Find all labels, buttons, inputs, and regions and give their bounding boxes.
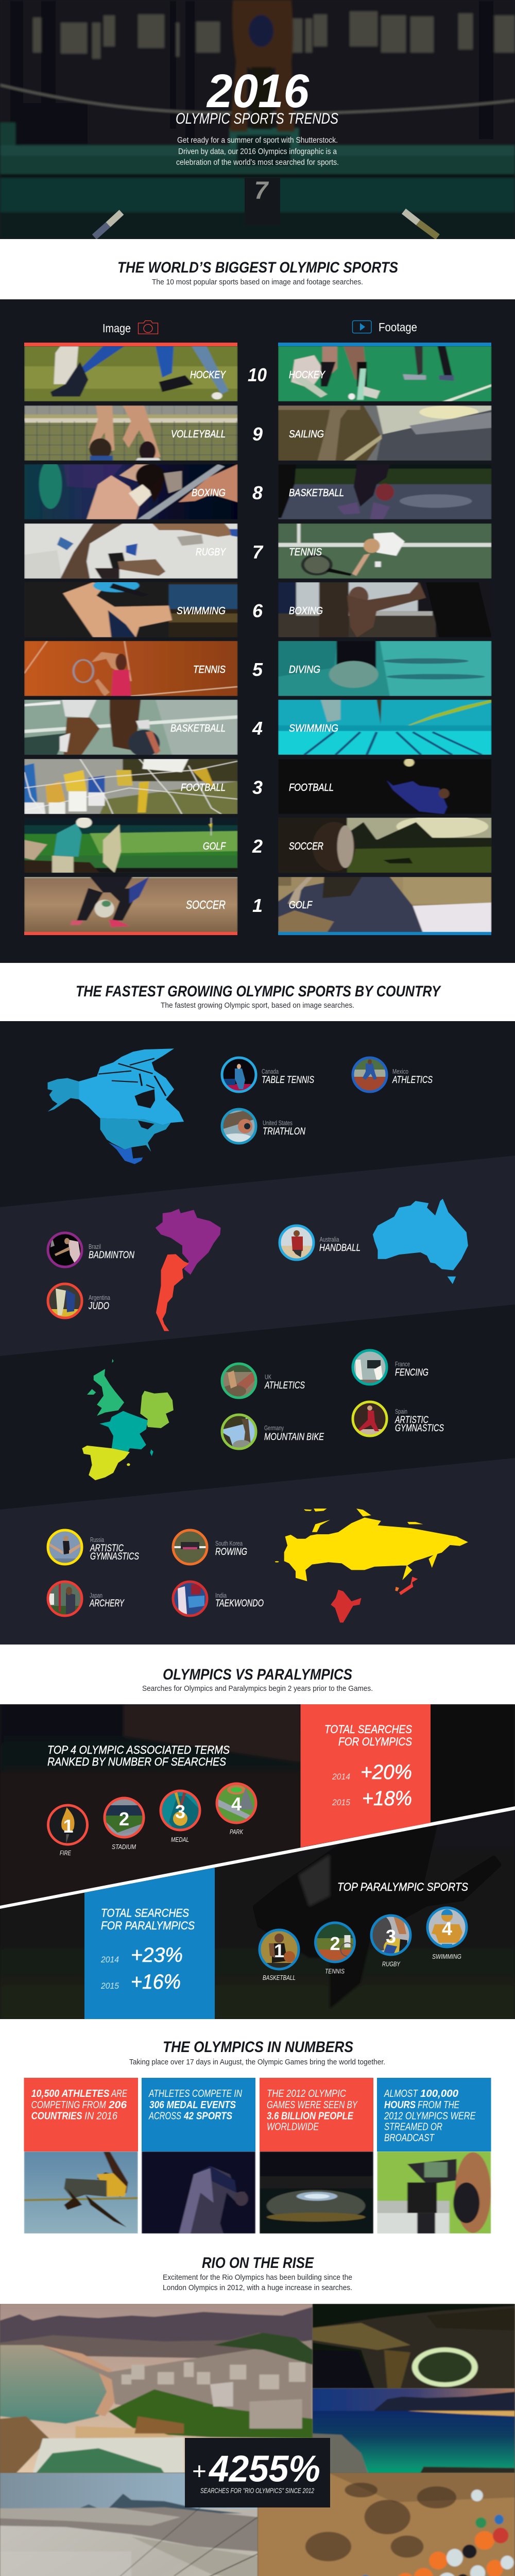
row 3 footage football [278,758,492,814]
term 2 stadium [104,1797,145,1851]
heading: olympics in numbers: THE OLYMPICS IN NUMBERS [163,2039,353,2056]
panel: rio photo collage [0,2304,515,2576]
badge: india: TAEKWONDO [215,1598,264,1609]
rank numbers: 9 [252,423,263,445]
hero subtitle: OLYMPIC SPORTS TRENDS [176,110,338,127]
card: viewers [260,2078,373,2233]
term 2 stadium: STADIUM [112,1843,136,1851]
term 4 park [216,1783,257,1836]
image column header: Image [102,321,131,335]
background stadium [0,1704,515,1910]
panel: top olympic terms: TOP 4 OLYMPIC ASSOCIATED TERMS [47,1743,230,1756]
row 2 footage soccer [278,816,492,873]
footage sport labels: SOCCER [289,841,323,852]
background sprinter [0,1803,515,2019]
heading: olympics vs paralympics: OLYMPICS VS PARALYMPICS [163,1666,352,1683]
badge: canada [221,1057,314,1093]
badge: uk: UK [265,1374,271,1381]
rank numbers: 5 [252,659,263,680]
heading: fastest growing [0,963,515,1021]
term 3 medal: MEDAL [171,1836,189,1843]
badge: brazil [47,1232,134,1268]
badge: spain: ARTISTIC [394,1415,428,1426]
photo: beach umbrellas [258,2473,515,2576]
badge: russia: Russia [90,1536,104,1544]
sport 1 basketball: 1 [274,1940,284,1961]
badge: mexico: ATHLETICS [392,1075,433,1086]
heading: olympics in numbers [0,2019,515,2303]
card: medal events: 42 SPORTS [183,2110,232,2122]
card: viewers: WORLDWIDE [267,2121,319,2133]
badge: germany: MOUNTAIN BIKE [264,1432,324,1443]
photo: rio at night [313,2304,515,2388]
badge: russia [47,1529,139,1565]
swimmer [230,0,295,131]
rank numbers [248,364,267,916]
row 6 image swimming [24,579,238,637]
image sport labels: RUGBY [196,547,226,558]
term 2 stadium: 2 [119,1808,129,1829]
heading: fastest growing: THE FASTEST GROWING OLYMPIC SPORTS BY COUNTRY [76,983,442,1000]
card: broadcast hours: 100,000 [420,2088,459,2099]
term 1 fire: 1 [63,1816,74,1837]
panel: total searches paralympics: 2015 [100,1981,119,1991]
badge: russia: GYMNASTICS [90,1551,139,1562]
panel: total searches paralympics: +16% [131,1971,181,1993]
footage sport labels [289,369,344,911]
hero intro: celebration of the world's most searched for sports. [176,158,339,167]
sport 1 basketball: BASKETBALL [263,1974,296,1981]
rank numbers: 7 [252,541,264,563]
rank numbers: 6 [252,600,263,621]
footage sport labels: GOLF [289,900,313,911]
badge: united states [221,1108,305,1144]
hero banner [0,0,515,239]
row 10 image hockey [24,346,238,401]
panel: total searches olympics: TOTAL SEARCHES [324,1723,412,1736]
card: broadcast hours: ALMOST [383,2088,418,2099]
badge: brazil: BADMINTON [89,1250,134,1261]
photo: copacabana [0,2304,313,2473]
row 4 image basketball [24,700,238,757]
stat box: + [192,2458,207,2484]
row 7 footage tennis [278,523,492,579]
panel: total searches olympics: +18% [362,1787,412,1810]
badge: uk: ATHLETICS [264,1380,305,1391]
card: athletes: COMPETING FROM [31,2099,106,2111]
term 1 fire [47,1804,89,1857]
row 5 footage diving [278,641,492,696]
badge: spain [352,1401,444,1437]
rank numbers: 4 [252,718,263,739]
row 9 image volleyball [24,405,238,461]
row 8 image boxing [24,460,238,519]
image sport labels: HOCKEY [190,369,226,381]
badge: australia: HANDBALL [319,1243,360,1253]
badge: france: FENCING [395,1367,428,1378]
panel: total searches olympics: 2015 [332,1798,350,1807]
badge: germany: Germany [264,1425,284,1432]
badge: japan [47,1581,125,1617]
sport 3 rugby: RUGBY [382,1961,401,1968]
card: athletes [24,2078,138,2233]
panel: total searches paralympics: +23% [131,1944,183,1967]
map: western europe [82,1359,174,1480]
badge: argentina [47,1283,110,1319]
map: north america [47,1048,184,1164]
footage sport labels: SAILING [289,429,324,440]
badge: germany [221,1414,324,1450]
image sport labels: BOXING [192,487,226,499]
stat box: 4255% [208,2448,320,2489]
badge: canada: TABLE TENNIS [262,1075,314,1086]
card: broadcast hours: STREAMED OR [384,2121,442,2133]
badge: france: France [395,1361,410,1368]
panel: total searches olympics [301,1704,431,1848]
row 5 image tennis [24,641,238,696]
image column header [102,320,158,335]
badge: mexico: Mexico [392,1068,408,1075]
rank numbers: 8 [252,482,263,503]
badge: spain: GYMNASTICS [395,1423,444,1434]
sport 1 basketball [259,1929,300,1981]
card: broadcast hours [377,2078,491,2233]
badge: india: India [215,1592,227,1599]
badge: mexico [352,1057,433,1093]
badge: australia [279,1225,360,1261]
badge: japan: ARCHERY [89,1598,125,1609]
map: russia japan india korea [275,1509,468,1622]
sport 4 swimming: SWIMMING [432,1953,461,1960]
sport 2 tennis: 2 [330,1933,340,1954]
map: australia [373,1199,468,1284]
badge: argentina: JUDO [88,1301,109,1312]
badge: argentina: Argentina [89,1294,110,1301]
card: broadcast hours: BROADCAST [384,2132,435,2144]
row 9 footage sailing [278,405,492,461]
row 1 image soccer [24,877,238,932]
heading: rio on the rise: London Olympics in 2012, with a huge increase in searches. [163,2283,352,2292]
sport 4 swimming: 4 [442,1918,452,1939]
card: medal events: ATHLETES COMPETE IN [148,2088,242,2099]
image sport labels: SOCCER [186,898,226,911]
term 4 park: 4 [231,1793,242,1815]
row 2 image golf [24,817,238,873]
heading: biggest sports: THE WORLD’S BIGGEST OLYMPIC SPORTS [117,259,398,276]
image sport labels: TENNIS [193,664,226,675]
panel: total searches olympics: +20% [360,1761,412,1784]
card: medal events: 306 MEDAL EVENTS [149,2099,236,2111]
card: medal events: ACROSS [148,2110,181,2122]
stat box [185,2438,330,2507]
badge: brazil: Brazil [89,1243,101,1250]
card: broadcast hours: HOURS [384,2099,416,2111]
heading: olympics in numbers: Taking place over 17 days in August, the Olympic Games bring the world together. [129,2058,385,2066]
card: viewers: GAMES WERE SEEN BY [267,2099,358,2111]
badge: united states: United States [263,1120,293,1127]
panel: total searches olympics: 2014 [332,1772,350,1782]
badge: south korea: ROWING [215,1547,247,1557]
panel: sports ranking [0,299,515,963]
row 3 image football [24,759,238,814]
image sport labels: VOLLEYBALL [171,429,226,440]
card: athletes: 206 [108,2099,127,2111]
heading: rio on the rise: RIO ON THE RISE [202,2255,314,2272]
lane number: 7 [254,177,269,205]
badge: uk [221,1363,305,1399]
card: athletes: 10,500 ATHLETES [31,2088,110,2099]
photo: ipanema dusk [313,2388,515,2473]
badge: japan: Japan [90,1592,102,1599]
panel: total searches paralympics: 2014 [100,1955,119,1964]
heading: biggest sports: The 10 most popular sports based on image and footage searches. [152,278,363,286]
hero title: 2016 [206,65,310,117]
rank numbers: 10 [248,364,267,385]
hero intro: Driven by data, our 2016 Olympics infographic is a [178,147,337,156]
term 3 medal [160,1790,201,1843]
badge: united states: TRIATHLON [263,1126,305,1137]
card: viewers: THE 2012 OLYMPIC [267,2088,346,2099]
badge: south korea [172,1529,247,1565]
panel: total searches paralympics: TOTAL SEARCHES [101,1906,189,1920]
heading: olympics vs paralympics: Searches for Olympics and Paralympics begin 2 years prior to the Games. [142,1684,373,1693]
row 10 footage hockey [278,346,492,401]
image sport labels: BASKETBALL [170,723,226,734]
sport 2 tennis: TENNIS [325,1968,345,1975]
panel: top paralympic sports [259,1880,468,1981]
badge: canada: Canada [262,1068,279,1075]
heading: fastest growing: The fastest growing Olympic sport, based on image searches. [161,1001,354,1010]
panel: top olympic terms: RANKED BY NUMBER OF SEARCHES [47,1755,226,1768]
image sport labels: SWIMMING [177,605,226,617]
row 8 footage basketball [278,464,492,519]
card: medal events [142,2078,255,2233]
footage sport labels: TENNIS [289,547,322,558]
footage column header: Footage [379,320,417,334]
badge: russia: ARTISTIC [90,1543,124,1554]
heading: rio on the rise [163,2255,352,2292]
image sport labels: FOOTBALL [181,782,226,793]
card: athletes: IN 2016 [84,2110,118,2122]
panel: total searches olympics: FOR OLYMPICS [338,1735,412,1748]
badge: spain: Spain [395,1408,407,1415]
badge: france [352,1349,428,1385]
card: broadcast hours: 2012 OLYMPICS WERE [384,2110,476,2122]
term 4 park: PARK [230,1828,244,1836]
sport 3 rugby [370,1914,411,1968]
footage column header [352,320,417,334]
badge: south korea: South Korea [215,1540,243,1547]
footage sport labels: FOOTBALL [289,782,334,793]
rank numbers: 1 [252,895,263,916]
card: viewers: 3.6 BILLION PEOPLE [267,2110,354,2122]
image sport labels: GOLF [203,841,226,852]
stat box: SEARCHES FOR "RIO OLYMPICS" SINCE 2012 [200,2487,314,2495]
row 1 footage golf [278,877,492,932]
panel: olympics vs paralympics [0,1704,515,2019]
footage sport labels: BASKETBALL [289,487,344,499]
rank numbers: 2 [252,836,263,857]
footage sport labels: DIVING [289,664,320,675]
sport 4 swimming [426,1907,468,1960]
sport 3 rugby: 3 [386,1926,396,1947]
panel: top olympic terms [47,1743,257,1857]
hero intro: Get ready for a summer of sport with Shutterstock. [177,136,338,145]
row 6 footage boxing [278,582,492,637]
sport 2 tennis [314,1922,355,1975]
panel: country bands [0,1021,515,1645]
badge: australia: Australia [319,1236,339,1243]
card: athletes: ARE [111,2088,127,2099]
card: athletes: COUNTRIES [31,2110,82,2122]
term 1 fire: FIRE [60,1850,72,1857]
rank numbers: 3 [252,777,263,798]
card: broadcast hours: FROM THE [418,2099,459,2111]
heading: biggest sports [0,239,515,299]
footage sport labels: HOCKEY [289,369,325,381]
image sport labels [170,369,226,911]
footage sport labels: BOXING [289,605,323,617]
map: south america [156,1209,221,1331]
term 3 medal: 3 [175,1801,185,1822]
panel: total searches paralympics [84,1868,215,2019]
heading: rio on the rise: Excitement for the Rio Olympics has been building since the [163,2273,352,2282]
hero intro [176,136,339,167]
photo: sugarloaf cable car [0,2473,258,2576]
footage sport labels: SWIMMING [289,723,338,734]
panel: top paralympic sports: TOP PARALYMPIC SPORTS [337,1880,468,1893]
panel: total searches paralympics: FOR PARALYMPICS [101,1919,195,1932]
diagonal divider [0,1806,515,1909]
heading: olympics vs paralympics [0,1645,515,1705]
row 4 footage swimming [278,700,492,755]
badge: india [172,1581,264,1617]
row 7 image rugby [24,523,238,579]
